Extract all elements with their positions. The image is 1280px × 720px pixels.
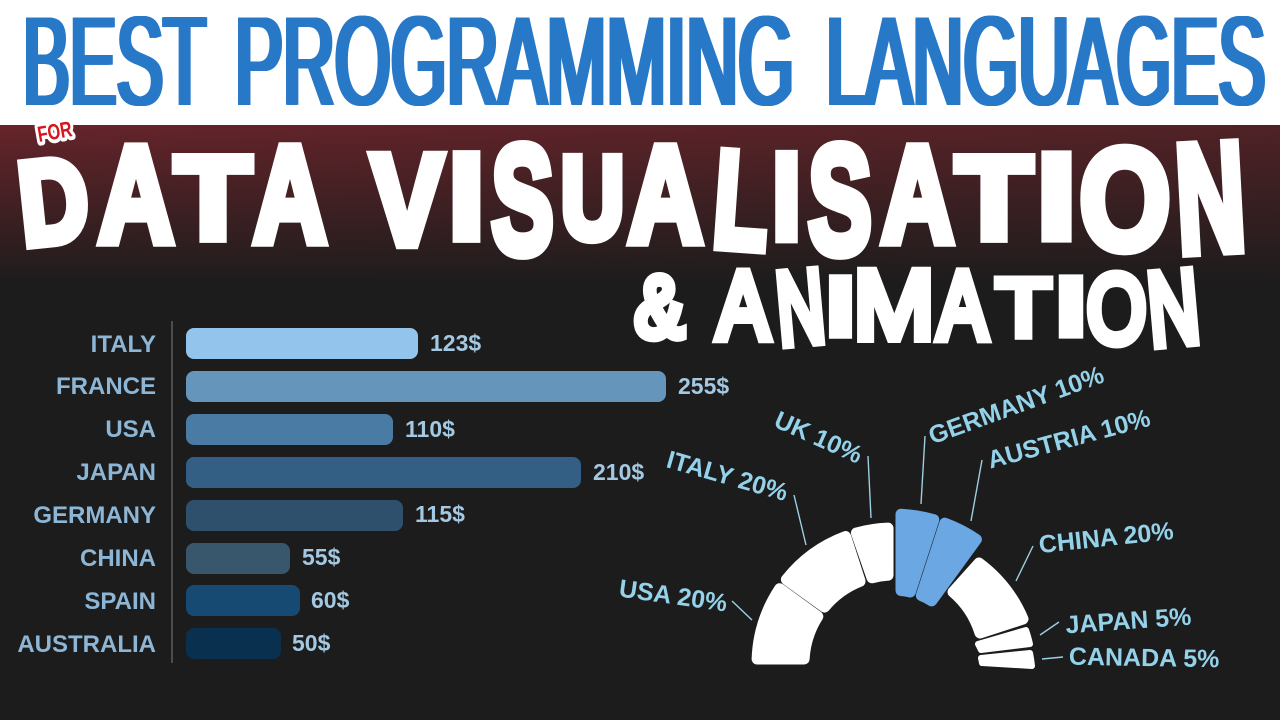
bar row: italy: 123$ — [430, 330, 481, 356]
heading: and animation: A — [717, 252, 769, 359]
bar row: italy: ITALY — [91, 331, 156, 358]
heading: data visualisation: A — [881, 118, 954, 271]
heading: data visualisation: A — [254, 118, 326, 271]
white header band — [0, 0, 1280, 125]
label: china 20% — [1016, 517, 1175, 581]
semi-donut chart — [617, 361, 1220, 673]
heading: data visualisation: I — [449, 128, 484, 265]
bar row: china: CHINA — [80, 545, 156, 572]
sticker: for: FOR — [36, 117, 74, 148]
bar row: australia: AUSTRALIA — [17, 631, 156, 658]
label: uk 10% — [770, 406, 871, 518]
heading: and animation: I — [1051, 260, 1091, 354]
bar row: china: 55$ — [302, 544, 341, 570]
heading: data visualisation — [12, 111, 1249, 287]
heading: and animation: A — [938, 253, 987, 360]
bar row: usa: USA — [105, 416, 156, 443]
bar chart — [17, 321, 729, 663]
bar row: usa: 110$ — [405, 416, 455, 442]
heading: data visualisation: U — [561, 133, 624, 263]
heading: data visualisation: S — [491, 114, 554, 286]
bar row: italy — [91, 328, 481, 359]
bar row: france: FRANCE — [56, 373, 156, 400]
label: italy 20% — [663, 446, 806, 545]
bar row: spain: SPAIN — [84, 588, 156, 615]
segment: austria — [921, 523, 976, 601]
heading: and animation: N — [1143, 248, 1204, 368]
heading: data visualisation: A — [98, 118, 174, 271]
bar row: japan: JAPAN — [76, 459, 156, 486]
heading: and animation: N — [772, 250, 829, 367]
heading: data visualisation: A — [628, 117, 703, 271]
bar row: spain — [84, 585, 350, 616]
bar row: china — [80, 543, 341, 574]
bar row: france — [56, 371, 729, 402]
heading: data visualisation: T — [956, 132, 1032, 264]
heading: and animation: M — [854, 250, 934, 359]
segment: japan — [978, 630, 1030, 650]
segment: china — [953, 563, 1023, 633]
heading: data visualisation: L — [709, 123, 774, 279]
bar row: france: 255$ — [678, 373, 729, 399]
heading: and animation: O — [1087, 256, 1146, 364]
bar row: australia — [17, 628, 331, 659]
heading: and animation — [635, 248, 1204, 368]
segment: italy — [786, 536, 860, 607]
heading: data visualisation: I — [1037, 129, 1076, 265]
heading: and animation: I — [822, 259, 859, 354]
heading: data visualisation: N — [1172, 111, 1249, 286]
title: best programming languages — [23, 0, 1266, 125]
label: japan 5%: JAPAN 5% — [1065, 603, 1192, 639]
chart axis — [171, 321, 173, 663]
heading: and animation: T — [996, 263, 1051, 353]
heading: data visualisation: D — [12, 132, 95, 271]
bar row: germany: 115$ — [415, 501, 465, 527]
bar row: germany — [33, 500, 465, 531]
heading: data visualisation: I — [773, 128, 800, 265]
segment: canada — [981, 653, 1032, 666]
bar row: japan: 210$ — [593, 459, 644, 485]
label: germany 10% — [921, 361, 1108, 504]
bar row: usa — [105, 414, 455, 445]
bar row: japan — [76, 457, 644, 488]
heading: data visualisation: O — [1079, 118, 1171, 280]
segment: germany — [901, 514, 934, 592]
label: china 20%: CHINA 20% — [1037, 517, 1175, 559]
label: canada 5%: CANADA 5% — [1069, 643, 1220, 673]
label: austria 10%: AUSTRIA 10% — [985, 404, 1153, 474]
bar row: australia: 50$ — [292, 630, 331, 656]
segment: usa — [757, 589, 818, 659]
label: italy 20%: ITALY 20% — [663, 446, 791, 507]
label: uk 10%: UK 10% — [770, 406, 866, 469]
label: usa 20%: USA 20% — [617, 575, 729, 618]
label: austria 10% — [971, 404, 1153, 521]
label: germany 10%: GERMANY 10% — [925, 361, 1108, 450]
heading: and animation: & — [635, 259, 684, 355]
bar row: germany: GERMANY — [33, 502, 156, 529]
segment: uk — [856, 528, 888, 578]
heading: data visualisation: V — [371, 128, 443, 273]
heading: data visualisation: T — [175, 132, 251, 264]
bar row: spain: 60$ — [311, 587, 350, 613]
heading: data visualisation: S — [808, 115, 872, 287]
